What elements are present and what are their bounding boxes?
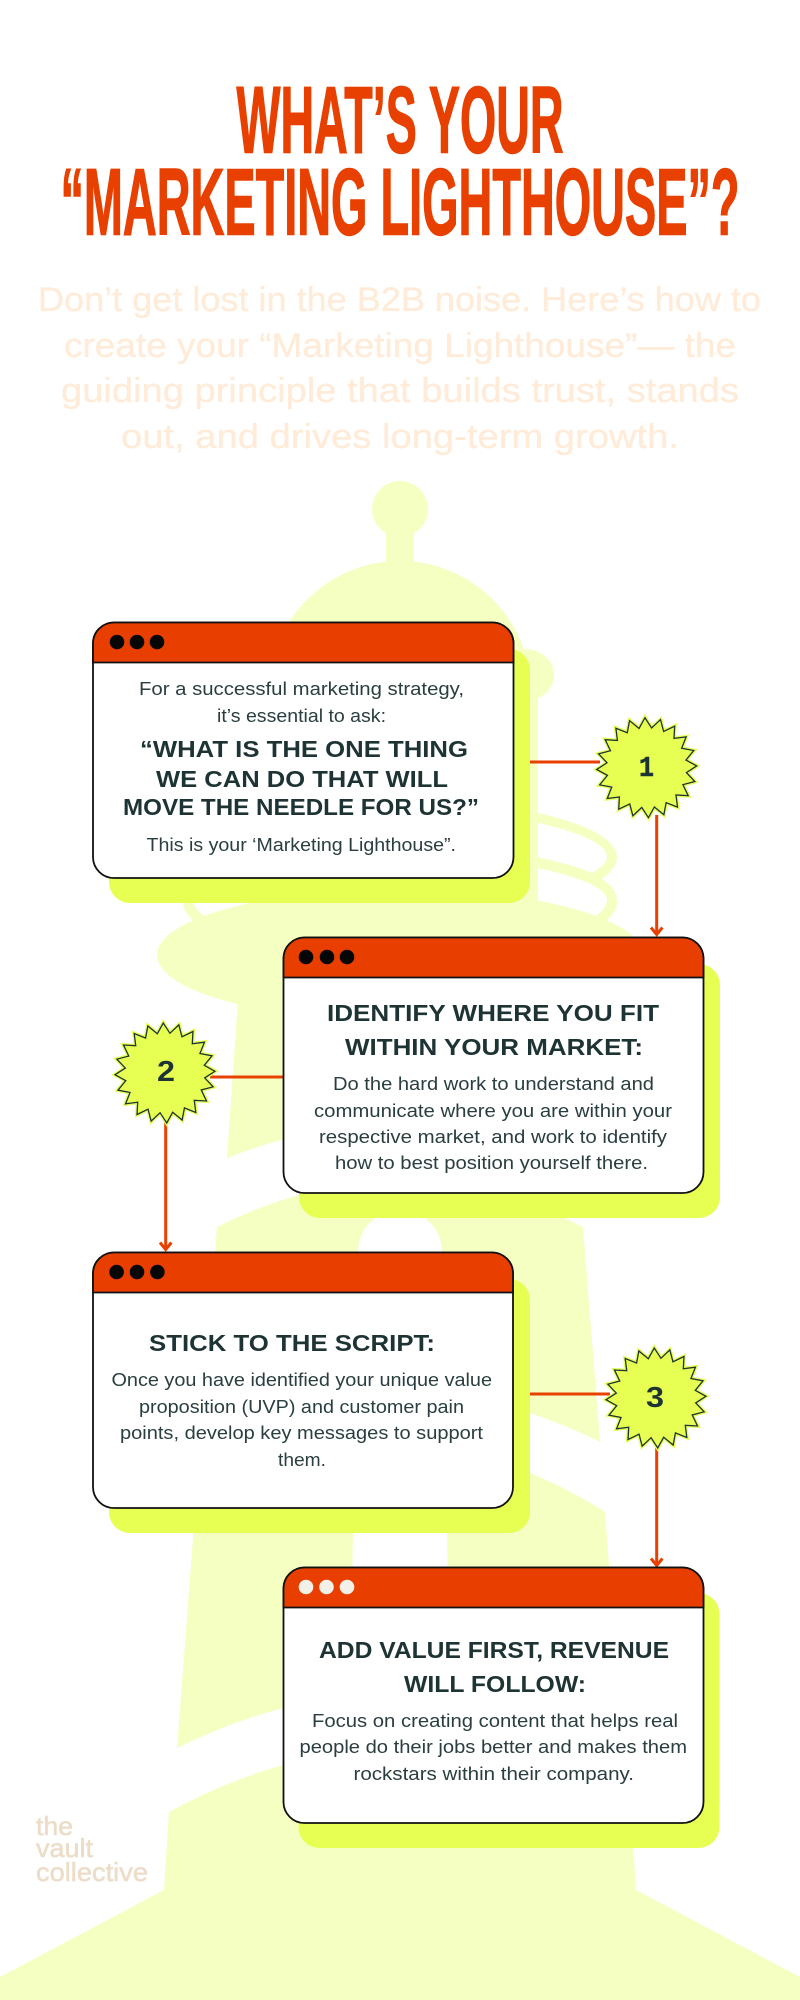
logo: the vault collective	[36, 1811, 148, 1887]
card 3 body text: points, develop key messages to support	[120, 1423, 483, 1443]
card 4 heading	[319, 1637, 669, 1697]
connector: card 2 to step 2 to card 3	[160, 1077, 283, 1250]
card 2 body text: Do the hard work to understand and	[333, 1074, 654, 1094]
card 2 heading: WITHIN YOUR MARKET:	[345, 1034, 643, 1060]
logo: the vault collective: the	[36, 1811, 73, 1841]
step badge 2	[113, 1021, 217, 1125]
step badge 3: 3	[646, 1382, 664, 1414]
connector: card 3 to step 3 to card 4	[530, 1394, 662, 1566]
card 1 heading: MOVE THE NEEDLE FOR US?”	[123, 794, 479, 820]
card 2 heading	[327, 1000, 659, 1060]
subtitle: guiding principle that builds trust, stands	[61, 372, 739, 410]
subtitle: out, and drives long-term growth.	[121, 418, 679, 456]
step badge 3	[604, 1346, 708, 1450]
card 2 body text: how to best position yourself there.	[335, 1153, 648, 1173]
step badge 1: 1	[639, 752, 654, 785]
card 1 heading	[123, 736, 479, 820]
card 1 heading: WE CAN DO THAT WILL	[156, 766, 448, 792]
card 1 heading: “WHAT IS THE ONE THING	[140, 736, 468, 762]
card 2 body text	[314, 1074, 672, 1173]
subtitle: create your “Marketing Lighthouse”— the	[64, 327, 736, 365]
card 4 body text: rockstars within their company.	[354, 1764, 634, 1784]
card 2: identify where you fit	[284, 938, 720, 1218]
card 4 heading: WILL FOLLOW:	[404, 1671, 586, 1697]
subtitle: Don’t get lost in the B2B noise. Here’s how to	[38, 281, 761, 319]
card 3 body text: Once you have identified your unique value	[112, 1370, 492, 1390]
step badge 2: 2	[157, 1056, 175, 1088]
card 3 body text	[112, 1370, 492, 1470]
card 1: intro	[93, 622, 530, 903]
step badge 1	[595, 716, 698, 819]
card 3: stick to the script	[93, 1252, 530, 1533]
card 4 heading: ADD VALUE FIRST, REVENUE	[319, 1637, 669, 1663]
card 1 lead-in text: it’s essential to ask:	[217, 706, 386, 726]
title	[60, 68, 740, 256]
connector: card 1 to step 1 to card 2	[530, 762, 662, 934]
subtitle	[38, 281, 761, 456]
card 3 heading: STICK TO THE SCRIPT:	[149, 1330, 435, 1356]
card 4: add value first	[284, 1568, 720, 1848]
lighthouse background silhouette	[0, 481, 800, 2000]
card 4 body text	[300, 1711, 687, 1784]
card 1 lead-in text: For a successful marketing strategy,	[139, 679, 464, 699]
card 1 closing text: This is your ‘Marketing Lighthouse”.	[146, 835, 456, 855]
card 2 body text: respective market, and work to identify	[319, 1127, 667, 1147]
card 2 heading: IDENTIFY WHERE YOU FIT	[327, 1000, 659, 1026]
card 2 body text: communicate where you are within your	[314, 1101, 672, 1121]
card 3 body text: proposition (UVP) and customer pain	[139, 1397, 464, 1417]
card 3 body text: them.	[278, 1450, 326, 1470]
logo: the vault collective: vault	[36, 1833, 94, 1863]
logo: the vault collective: collective	[36, 1857, 148, 1887]
card 4 body text: people do their jobs better and makes them	[300, 1737, 687, 1757]
card 1 lead-in text	[139, 679, 464, 726]
card 4 body text: Focus on creating content that helps real	[312, 1711, 678, 1731]
